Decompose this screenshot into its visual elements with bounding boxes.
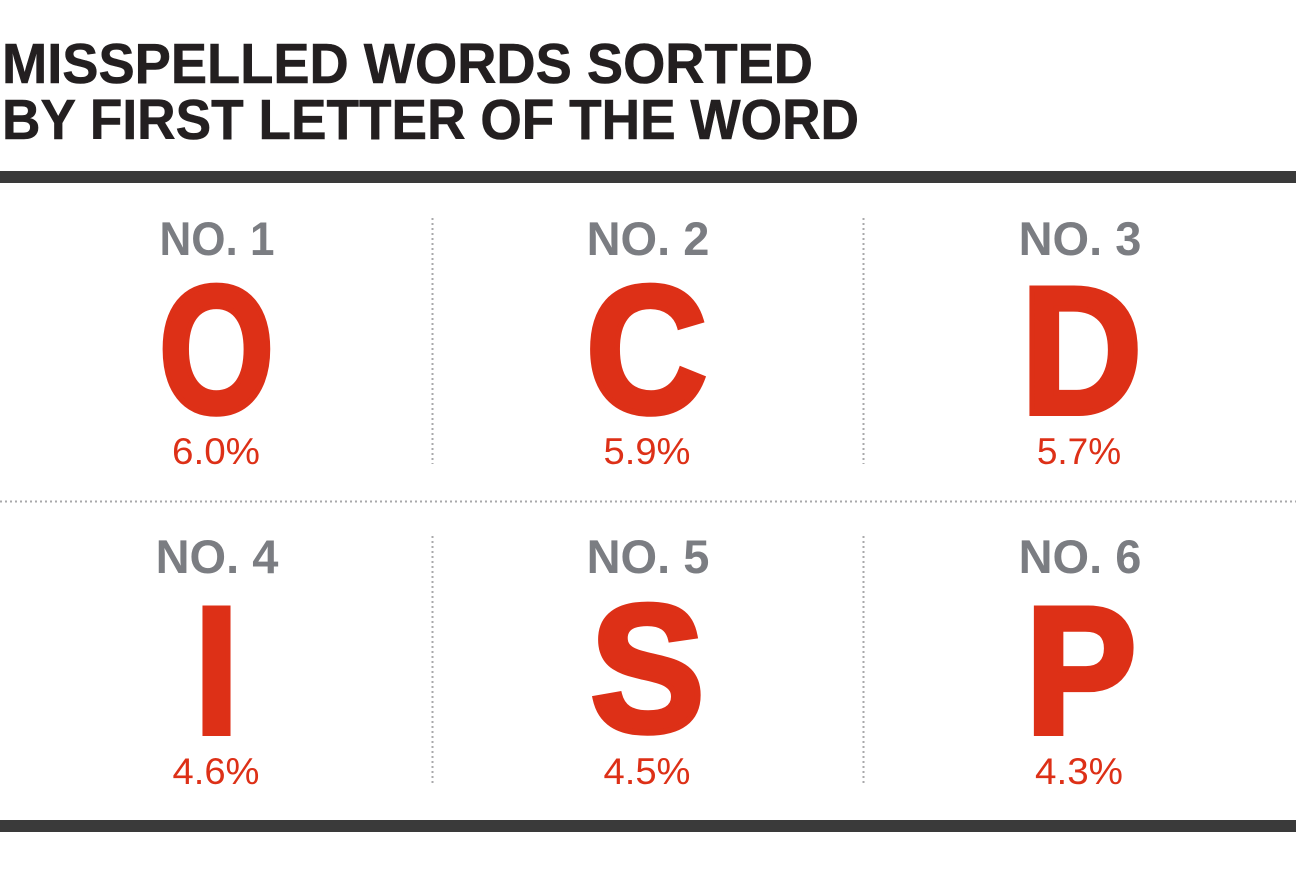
title: BY FIRST LETTER OF THE WORD xyxy=(2,88,859,151)
panel: rank 6 letter P: 4.3% xyxy=(1035,751,1123,792)
panel: rank 4 letter I: I xyxy=(194,570,238,772)
panel: rank 5 letter S: 4.5% xyxy=(604,751,690,792)
panel: rank 4 letter I xyxy=(156,530,278,792)
title: MISSPELLED WORDS SORTED xyxy=(2,32,813,95)
panel: rank 2 letter C: 5.9% xyxy=(604,431,690,472)
title xyxy=(2,32,859,151)
panel: rank 1 letter O: NO. 1 xyxy=(160,212,274,265)
panel: rank 1 letter O: O xyxy=(159,249,274,451)
panel: rank 4 letter I: NO. 4 xyxy=(156,530,278,583)
panel: rank 3 letter D: NO. 3 xyxy=(1019,212,1141,265)
panel: rank 4 letter I: 4.6% xyxy=(172,751,260,792)
panel: rank 1 letter O xyxy=(159,212,274,472)
panel: rank 2 letter C: C xyxy=(586,249,707,451)
panel: rank 6 letter P: NO. 6 xyxy=(1019,530,1141,583)
panel: rank 5 letter S: S xyxy=(590,568,704,770)
bottom rule xyxy=(0,820,1296,832)
panel: rank 1 letter O: 6.0% xyxy=(172,431,260,472)
panel: rank 3 letter D: D xyxy=(1021,250,1142,452)
panel: rank 2 letter C: NO. 2 xyxy=(587,212,709,265)
panel: rank 6 letter P: P xyxy=(1026,570,1136,772)
panel: rank 3 letter D: 5.7% xyxy=(1037,431,1121,472)
panel: rank 5 letter S: NO. 5 xyxy=(587,530,709,583)
top rule xyxy=(0,171,1296,183)
